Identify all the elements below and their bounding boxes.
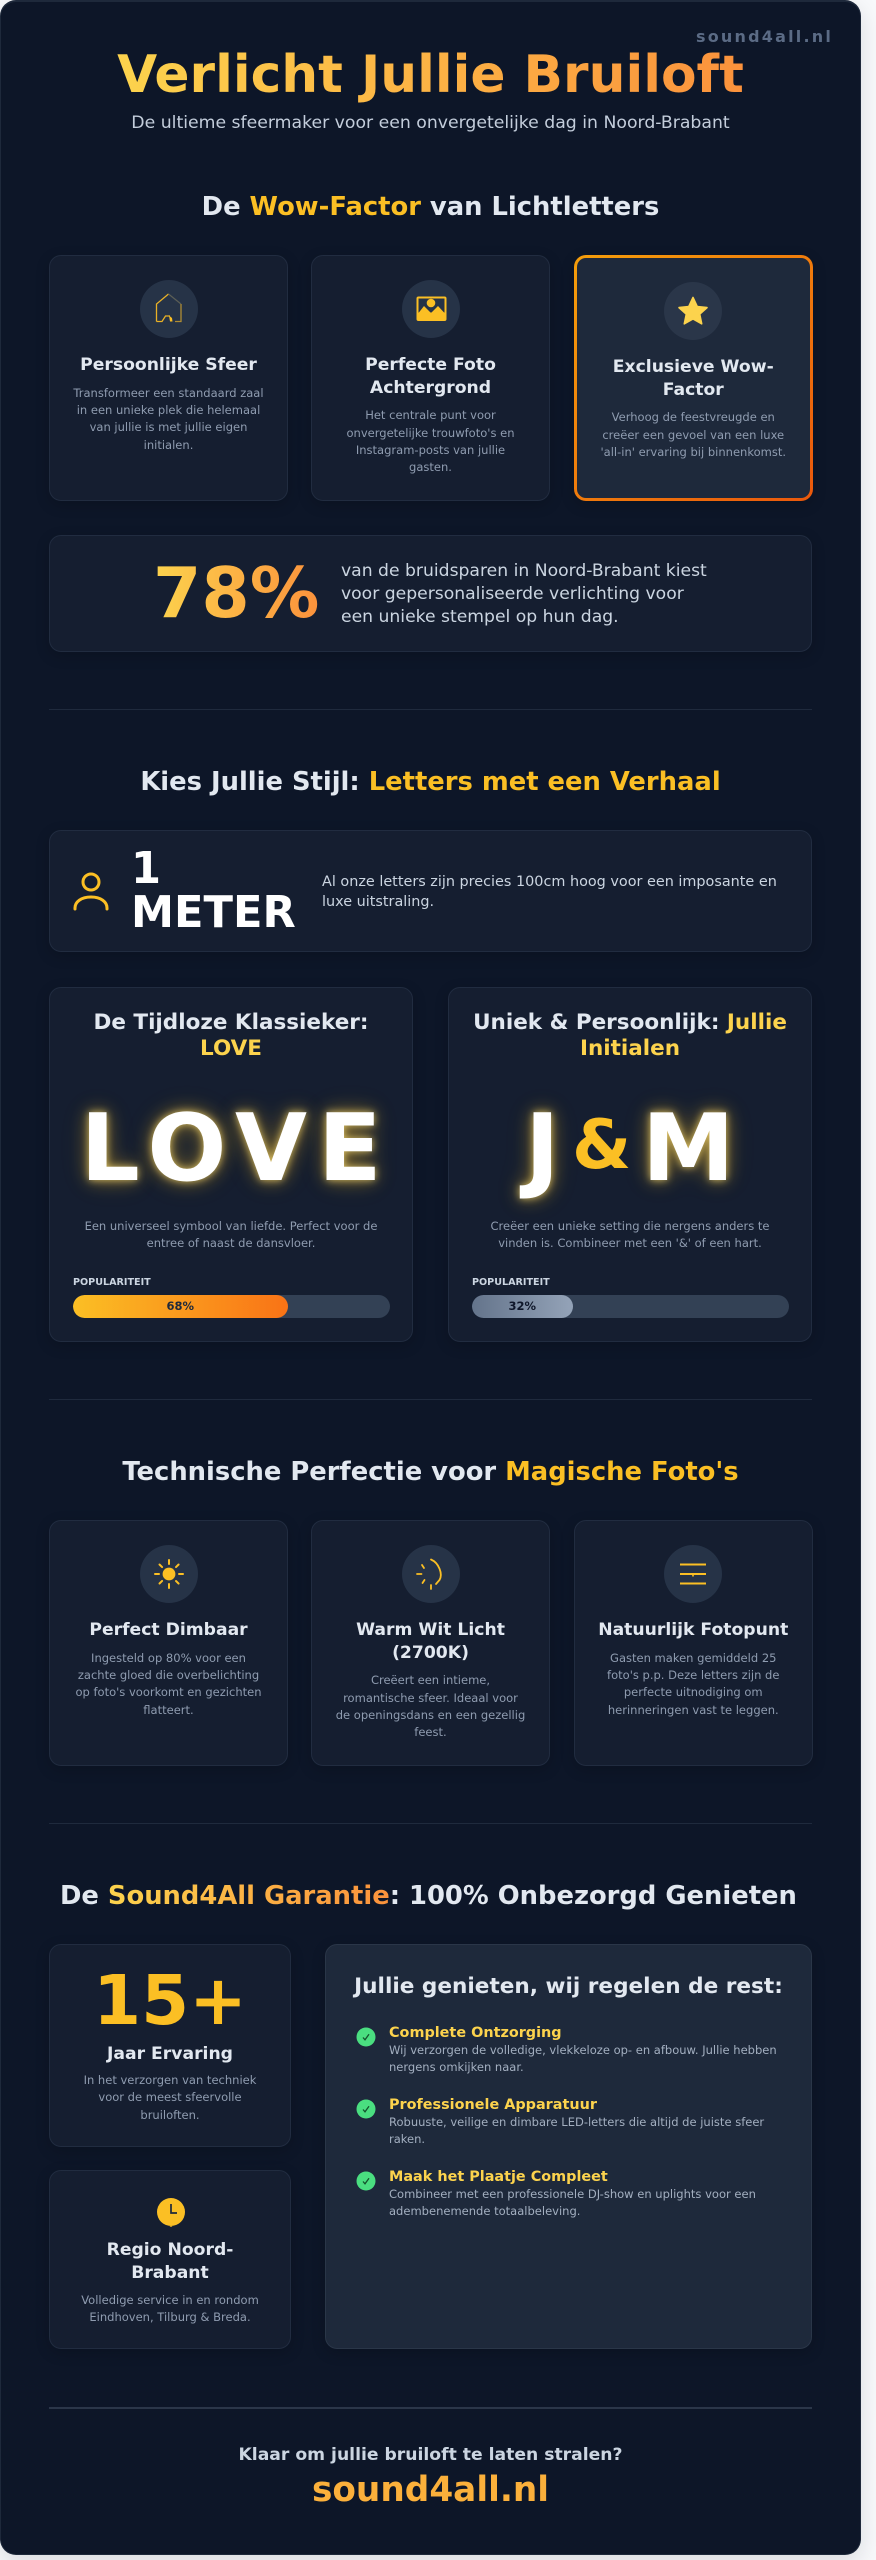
item text bbox=[389, 2043, 777, 2074]
card title: Achtergrond bbox=[370, 378, 491, 398]
panel heading bbox=[473, 1010, 787, 1061]
card text: Volledige service in en rondom bbox=[81, 2293, 259, 2307]
card text: feest. bbox=[414, 1725, 447, 1739]
statistic text bbox=[341, 561, 707, 627]
card text: creëer een gevoel van een luxe bbox=[602, 428, 784, 442]
popularity bar: 32%: 32% bbox=[508, 1299, 536, 1313]
big label: 1 meter: 1 bbox=[131, 844, 161, 894]
card title: (2700K) bbox=[392, 1643, 469, 1663]
card text: van jullie is met jullie eigen bbox=[90, 420, 247, 434]
heading: garantie: De Sound4All Garantie: 100% Onbezorgd Genieten bbox=[60, 1881, 797, 1911]
description bbox=[322, 874, 777, 910]
card text: romantische sfeer. Ideaal voor bbox=[343, 1691, 518, 1705]
letter J: J bbox=[525, 1094, 560, 1202]
item text: Combineer met een professionele DJ-show en uplights voor een bbox=[389, 2187, 756, 2201]
card text: herinneringen vast te leggen. bbox=[608, 1703, 779, 1717]
stat text: voor de meest sfeervolle bbox=[98, 2090, 242, 2104]
statistic text: van de bruidsparen in Noord-Brabant kiest bbox=[341, 561, 707, 581]
ampersand: & bbox=[572, 1106, 631, 1185]
description: Al onze letters zijn precies 100cm hoog voor een imposante en bbox=[322, 874, 777, 890]
panel: perfect dimbaar bbox=[49, 1520, 288, 1766]
card text bbox=[336, 1673, 525, 1739]
item title: Maak het Plaatje Compleet bbox=[389, 2169, 608, 2185]
panel: 1 meter bbox=[49, 830, 812, 952]
panel text: entree of naast de dansvloer. bbox=[147, 1236, 315, 1250]
panel: persoonlijke sfeer bbox=[49, 255, 288, 501]
glowing letters: LOVE: LOVE bbox=[80, 1094, 392, 1202]
card title: Factor bbox=[663, 380, 724, 400]
description: luxe uitstraling. bbox=[322, 894, 434, 910]
icon: check bbox=[356, 2171, 376, 2191]
subtitle: De ultieme sfeermaker voor een onvergetelijke dag in Noord-Brabant bbox=[131, 113, 730, 133]
panel text bbox=[490, 1219, 770, 1250]
item title: Complete Ontzorging bbox=[389, 2025, 562, 2041]
card title: Exclusieve Wow- bbox=[613, 357, 774, 377]
card title bbox=[107, 2240, 233, 2283]
stat text bbox=[84, 2073, 256, 2122]
icon: sun bbox=[140, 1545, 198, 1603]
icon: house bbox=[140, 280, 198, 338]
card text: perfecte uitnodiging om bbox=[624, 1685, 763, 1699]
card text bbox=[600, 410, 786, 459]
big number: 15+ bbox=[93, 1961, 247, 2041]
title: Verlicht Jullie Bruiloft bbox=[117, 45, 744, 105]
panel: initialen bbox=[448, 987, 812, 1342]
panel text: Een universeel symbool van liefde. Perfect voor de bbox=[85, 1219, 377, 1233]
card title: Perfect Dimbaar bbox=[89, 1620, 248, 1640]
card text bbox=[607, 1651, 779, 1717]
popularity bar: 68% bbox=[72, 1295, 390, 1318]
card text: Ingesteld op 80% voor een bbox=[91, 1651, 246, 1665]
panel: warm wit licht bbox=[311, 1520, 550, 1766]
card text bbox=[346, 408, 514, 474]
panel heading: Initialen bbox=[580, 1036, 680, 1061]
card text: Het centrale punt voor bbox=[365, 408, 496, 422]
statistic text: een unieke stempel op hun dag. bbox=[341, 607, 619, 627]
icon: warm light bbox=[402, 1545, 460, 1603]
item text: adembenemende totaalbeleving. bbox=[389, 2204, 580, 2218]
panel: 15+ jaar ervaring bbox=[49, 1944, 291, 2147]
card title: Perfecte Foto bbox=[365, 355, 496, 375]
card text: op foto's voorkomt en gezichten bbox=[75, 1685, 262, 1699]
icon: lines bbox=[664, 1545, 722, 1603]
stat label: Jaar Ervaring bbox=[107, 2044, 233, 2064]
footer link: sound4all.nl bbox=[312, 2470, 549, 2510]
card title: Natuurlijk Fotopunt bbox=[598, 1620, 788, 1640]
panel: 78% statistic bbox=[49, 535, 812, 652]
card text: foto's p.p. Deze letters zijn de bbox=[607, 1668, 779, 1682]
item text: raken. bbox=[389, 2132, 425, 2146]
big label: 1 meter: METER bbox=[131, 888, 296, 938]
card text: Creëert een intieme, bbox=[371, 1673, 490, 1687]
stat text: In het verzorgen van techniek bbox=[84, 2073, 256, 2087]
statistic text: voor gepersonaliseerde verlichting voor bbox=[341, 584, 684, 604]
statistic number: 78% bbox=[153, 553, 319, 634]
panel text: Creëer een unieke setting die nergens anders te bbox=[490, 1219, 770, 1233]
panel: regio noord-brabant bbox=[49, 2170, 291, 2349]
icon: clock bbox=[157, 2198, 185, 2227]
card title: Brabant bbox=[131, 2263, 209, 2283]
panel: love bbox=[49, 987, 413, 1342]
popularity label: POPULARITEIT bbox=[73, 1277, 151, 1288]
icon: check bbox=[356, 2100, 376, 2118]
heading: technische perfectie: Technische Perfectie voor Magische Foto's bbox=[122, 1457, 739, 1487]
item text: Wij verzorgen de volledige, vlekkeloze op- en afbouw. Jullie hebben bbox=[389, 2043, 777, 2057]
panel heading: Jullie genieten, wij regelen de rest: bbox=[354, 1974, 783, 1999]
panel: natuurlijk fotopunt bbox=[574, 1520, 812, 1766]
panel text bbox=[85, 1219, 377, 1250]
card title: Regio Noord- bbox=[107, 2240, 233, 2260]
card title: Warm Wit Licht bbox=[356, 1620, 505, 1640]
item text bbox=[389, 2115, 764, 2146]
panel: perfecte foto achtergrond bbox=[311, 255, 550, 501]
card text bbox=[73, 386, 264, 452]
card text: Verhoog de feestvreugde en bbox=[612, 410, 775, 424]
card text: Transformeer een standaard zaal bbox=[73, 386, 264, 400]
letter M: M bbox=[642, 1094, 735, 1202]
panel text: vinden is. Combineer met een '&' of een hart. bbox=[498, 1236, 762, 1250]
popularity label: POPULARITEIT bbox=[472, 1277, 550, 1288]
card title bbox=[613, 357, 774, 400]
card title bbox=[365, 355, 496, 398]
item text: Robuuste, veilige en dimbare LED-letters die altijd de juiste sfeer bbox=[389, 2115, 764, 2129]
list item: professionele apparatuur bbox=[356, 2097, 764, 2146]
list item: complete ontzorging bbox=[356, 2025, 777, 2074]
panel heading: De Tijdloze Klassieker: bbox=[93, 1010, 369, 1035]
panel heading: LOVE bbox=[200, 1036, 262, 1061]
card text: Instagram-posts van jullie bbox=[356, 443, 505, 457]
item text: nergens omkijken naar. bbox=[389, 2060, 524, 2074]
panel heading: Uniek & Persoonlijk: Jullie bbox=[473, 1010, 787, 1035]
list item: maak het plaatje compleet bbox=[356, 2168, 786, 2220]
card text: onvergetelijke trouwfoto's en bbox=[346, 426, 514, 440]
item title: Professionele Apparatuur bbox=[389, 2097, 597, 2113]
panel: exclusieve wow-factor (highlighted) bbox=[574, 255, 812, 501]
card title bbox=[356, 1620, 505, 1663]
card text: gasten. bbox=[409, 460, 452, 474]
panel heading bbox=[93, 1010, 369, 1061]
popularity bar: 32% bbox=[472, 1295, 788, 1318]
card text: initialen. bbox=[144, 438, 193, 452]
icon: star bbox=[664, 282, 722, 340]
icon: photo bbox=[402, 280, 460, 338]
panel: jullie genieten checklist bbox=[325, 1944, 812, 2349]
popularity bar: 68%: 68% bbox=[166, 1299, 194, 1313]
big label: 1 meter bbox=[131, 844, 296, 938]
card text: zachte gloed die overbelichting bbox=[78, 1668, 259, 1682]
item text bbox=[389, 2186, 756, 2221]
icon: check bbox=[356, 2028, 376, 2046]
stat text: bruiloften. bbox=[140, 2108, 200, 2122]
heading: wow-factor: De Wow-Factor van Lichtletters bbox=[202, 192, 659, 222]
card text bbox=[75, 1651, 262, 1717]
glowing letters: J & M bbox=[510, 1094, 740, 1210]
icon: person bbox=[74, 872, 108, 910]
card text bbox=[81, 2293, 259, 2324]
watermark: sound4all.nl: sound4all.nl bbox=[696, 27, 833, 46]
card text: Eindhoven, Tilburg & Breda. bbox=[89, 2310, 251, 2324]
heading: kies jullie stijl: Kies Jullie Stijl: Letters met een Verhaal bbox=[140, 767, 721, 797]
card title: Persoonlijke Sfeer bbox=[80, 355, 257, 375]
footer call to action: Klaar om jullie bruiloft te laten stralen? bbox=[238, 2445, 622, 2465]
card text: Gasten maken gemiddeld 25 bbox=[610, 1651, 776, 1665]
card text: 'all-in' ervaring bij binnenkomst. bbox=[600, 445, 786, 459]
card text: flatteert. bbox=[143, 1703, 194, 1717]
card text: de openingsdans en een gezellig bbox=[336, 1708, 525, 1722]
card text: in een unieke plek die helemaal bbox=[77, 403, 260, 417]
